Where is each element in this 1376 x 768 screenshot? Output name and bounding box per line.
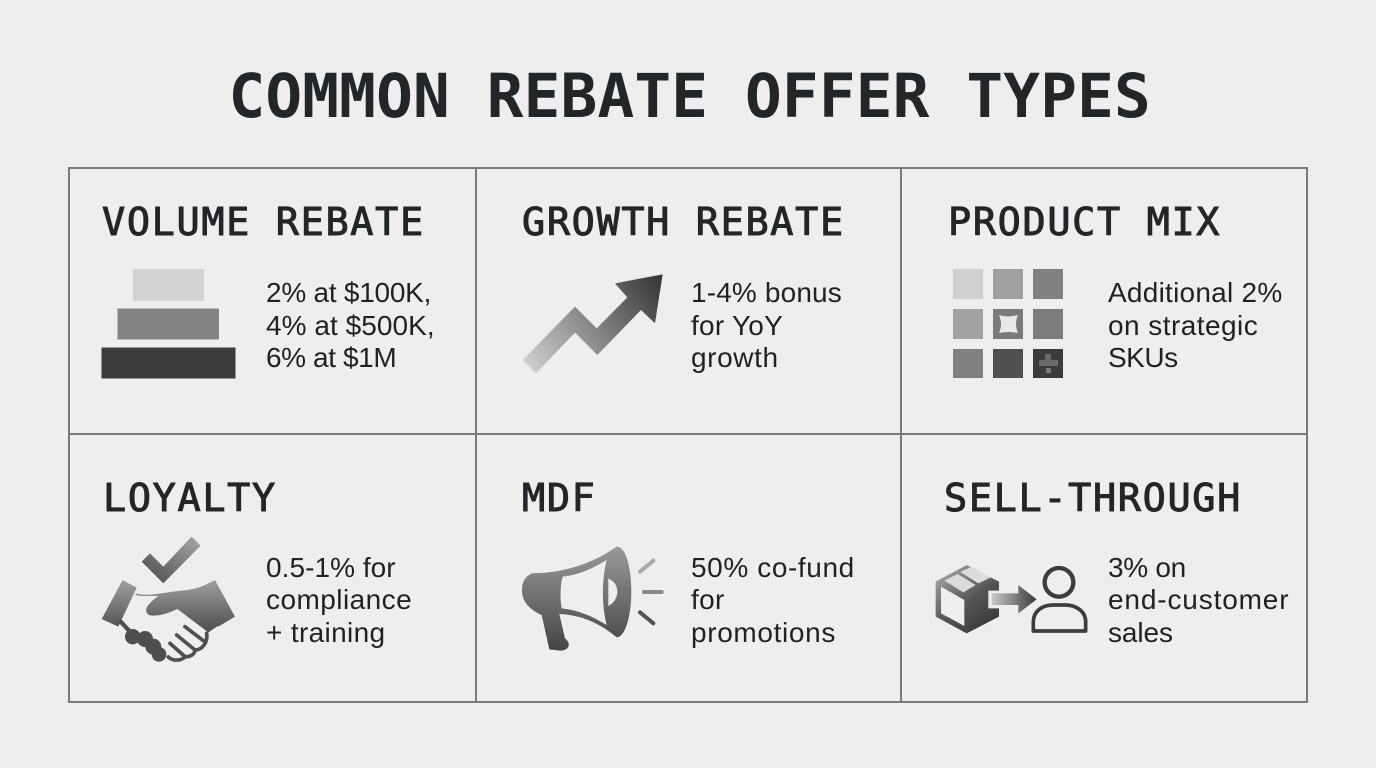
text: growth bonus: for YoY (691, 310, 783, 341)
panel: loyalty (102, 476, 412, 662)
heading: loyalty: LOYALTY (103, 476, 277, 521)
heading: sell-through: SELL-THROUGH (944, 476, 1242, 521)
text: growth bonus: 1-4% bonus (691, 277, 842, 308)
icon: product grid (953, 269, 1063, 378)
text: loyalty detail: compliance (266, 584, 412, 615)
text: product mix detail: on strategic (1108, 310, 1258, 341)
panel: sell-through (936, 476, 1289, 648)
text: loyalty detail: 0.5-1% for (266, 552, 396, 583)
text: volume tiers: 6% at $1M (266, 342, 396, 373)
text: product mix detail: Additional 2% (1108, 277, 1282, 308)
text: growth bonus: growth (691, 342, 779, 373)
panel: product mix (948, 200, 1282, 378)
text: mdf detail: promotions (691, 617, 836, 648)
text: sell-through detail: end-customer (1108, 584, 1289, 615)
icon: megaphone (522, 547, 662, 651)
text: loyalty detail: + training (266, 617, 385, 648)
panel: mdf (522, 476, 855, 651)
icon: box to customer (936, 565, 1086, 633)
text: volume tiers: 2% at $100K, (266, 277, 431, 308)
panel: growth rebate (522, 200, 845, 373)
text: sell-through detail: sales (1108, 617, 1173, 648)
heading: mdf: MDF (522, 476, 596, 521)
text: product mix detail: SKUs (1108, 342, 1178, 373)
text: mdf detail: 50% co-fund (691, 552, 855, 583)
icon: handshake with check (102, 537, 235, 662)
grid frame (69, 168, 1307, 702)
title: COMMON REBATE OFFER TYPES (228, 61, 1151, 132)
icon: stacked tiers (102, 269, 236, 378)
text: mdf detail: for (691, 584, 725, 615)
panel: volume rebate (102, 200, 435, 378)
text: volume tiers: 4% at $500K, (266, 310, 435, 341)
heading: growth rebate: GROWTH REBATE (522, 200, 845, 245)
heading: volume rebate: VOLUME REBATE (102, 200, 425, 245)
heading: product mix: PRODUCT MIX (948, 200, 1221, 245)
icon: rising arrow (523, 274, 663, 373)
text: sell-through detail: 3% on (1108, 552, 1186, 583)
